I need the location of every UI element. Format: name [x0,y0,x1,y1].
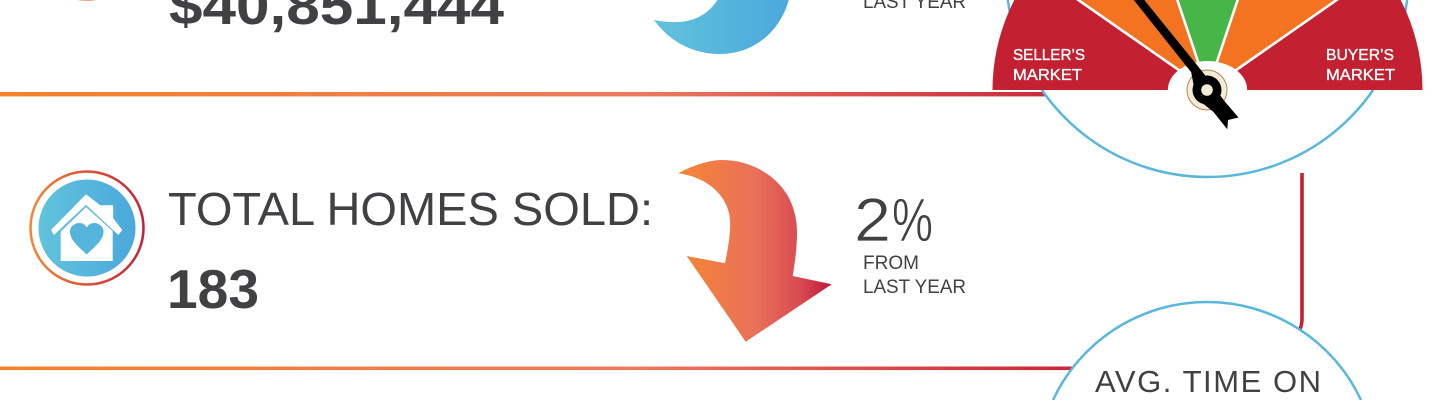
label: buyer's market: BUYER’S [1326,47,1394,64]
arrow: orange-red down arrow [678,160,832,342]
house roof [52,195,122,234]
gauge hub black ring [1192,76,1222,104]
change caption: last year: LAST YEAR [863,277,966,298]
panel: average time on market circle [1053,302,1361,400]
label: seller's market second line: MARKET [1013,67,1082,84]
gauge white separators [1064,0,1351,90]
gauge [992,0,1422,177]
divider line: upper row [0,92,1050,96]
heart [70,223,104,254]
gauge white centre [1168,61,1247,90]
gauge green band [1174,0,1241,90]
change value: 2%: % [892,186,933,254]
house body [61,207,113,261]
divider line: lower row [0,366,1080,370]
gauge red half disc [992,0,1422,90]
change caption: from: FROM [863,253,919,274]
gauge needle [1133,0,1238,129]
icon blue disc [38,180,136,276]
gauge outer circle [1006,0,1408,177]
change value: 2% [854,186,933,254]
value: 183: 183 [167,258,259,320]
icon: house with heart [30,172,144,284]
label: buyer's market second line: MARKET [1326,67,1395,84]
heading: avg. time on: AVG. TIME ON [1095,364,1321,399]
gauge hub ring [1187,70,1227,110]
connector line [1300,173,1302,329]
heading: total homes sold: TOTAL HOMES SOLD: [168,183,653,235]
gauge orange band [1064,0,1351,90]
icon outer ring [30,172,144,284]
arrow: blue up arrow bottom curve [654,0,789,54]
gauge hub centre [1201,84,1213,96]
label: seller's market: SELLER’S [1013,47,1085,64]
circle outline [1053,302,1361,400]
change value: 2%: 2 [854,186,891,254]
